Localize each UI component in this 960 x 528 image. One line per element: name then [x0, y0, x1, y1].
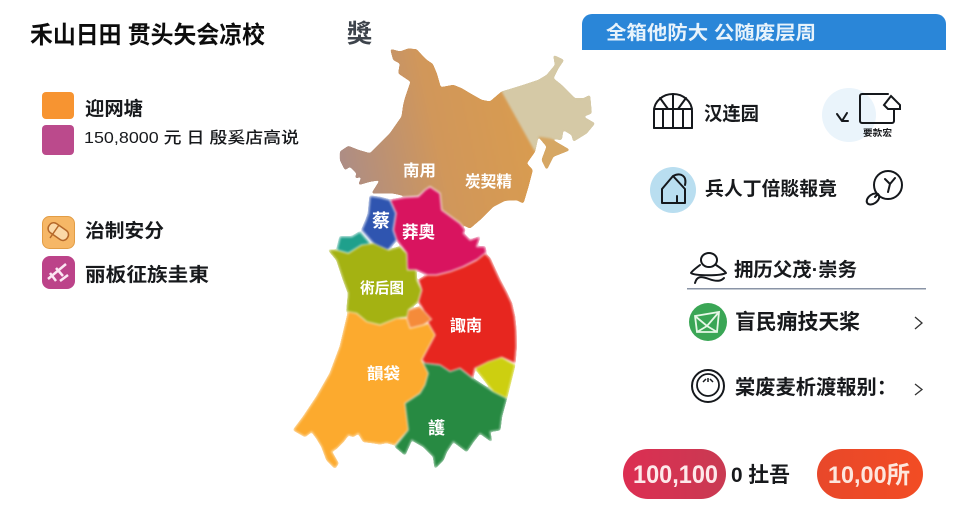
icon: arched building: [654, 94, 692, 128]
map labels: 莽奧: [402, 223, 435, 242]
map labels: 韻袋: [367, 365, 400, 383]
legend label: magenta: 150,8000 元 日 殷奚店高说: [84, 129, 299, 147]
region: olive: [328, 243, 422, 325]
legend: icon items: [42, 216, 209, 289]
region: north-east beige: [502, 55, 595, 152]
icon: magnifier: [865, 171, 902, 207]
label: clock row: 棠废麦析渡報别：: [735, 376, 897, 399]
icon: orange tag: [42, 216, 74, 248]
pill: orange value: 10,00所: [828, 462, 910, 489]
region: magenta: [390, 187, 487, 275]
region: yellow: [475, 357, 515, 398]
title: 禾山日田 贯头矢会凉校: [30, 22, 265, 49]
label: building: 汉连园: [704, 103, 759, 125]
arrow: row two chevron: [915, 384, 922, 395]
icon: person: [691, 253, 726, 283]
icon: clock circle: [692, 370, 724, 402]
legend: colour swatches: [42, 92, 299, 155]
region: small orange: [407, 307, 432, 328]
map labels: 護: [428, 418, 445, 438]
region: red: [418, 253, 516, 378]
map labels: 術后图: [360, 280, 404, 297]
region: teal: [337, 232, 372, 253]
heading text: 拥历父茂·崇务: [734, 259, 857, 281]
item label: magenta: 丽板征族圭東: [85, 263, 209, 286]
label: green row: 盲民痈技天桨: [735, 310, 860, 334]
icon: magenta tools: [42, 256, 75, 289]
region: blue: [362, 196, 397, 250]
legend label: orange: 迎网塘: [85, 97, 143, 120]
map labels: [360, 162, 512, 438]
item label: orange: 治制安分: [85, 220, 164, 242]
region: green: [395, 360, 507, 468]
region: northern tan: [340, 49, 535, 228]
map of regions: [293, 20, 595, 468]
label: tent: 兵人丁倍賧報竟: [705, 177, 837, 200]
region: large amber: [293, 312, 435, 468]
icon: green mail circle: [689, 303, 727, 341]
map labels: 諏南: [450, 317, 482, 335]
header text: 全箱他防大 公随废层周: [606, 21, 816, 44]
swatch: orange: [42, 92, 74, 119]
region: peninsula tan: [538, 137, 570, 170]
header bar: [582, 14, 946, 50]
pill: red value: [623, 449, 726, 499]
map labels: 蔡: [372, 211, 390, 231]
map labels: 炭契精: [465, 172, 512, 191]
icon: tent in blue circle: [650, 167, 696, 213]
arrow: row one chevron: [915, 317, 922, 329]
map labels: 南用: [403, 162, 436, 180]
small icon caption: 要款宏: [863, 127, 892, 138]
pill: red value: 100,100: [633, 461, 718, 489]
section heading with person icon: [691, 253, 857, 283]
pill: orange value: [817, 449, 923, 499]
map smudge label: 獎: [347, 20, 372, 48]
swatch: magenta: [42, 125, 74, 155]
value caption: 0 扗吾: [731, 464, 790, 487]
icon: document in pale circle: [822, 88, 900, 142]
